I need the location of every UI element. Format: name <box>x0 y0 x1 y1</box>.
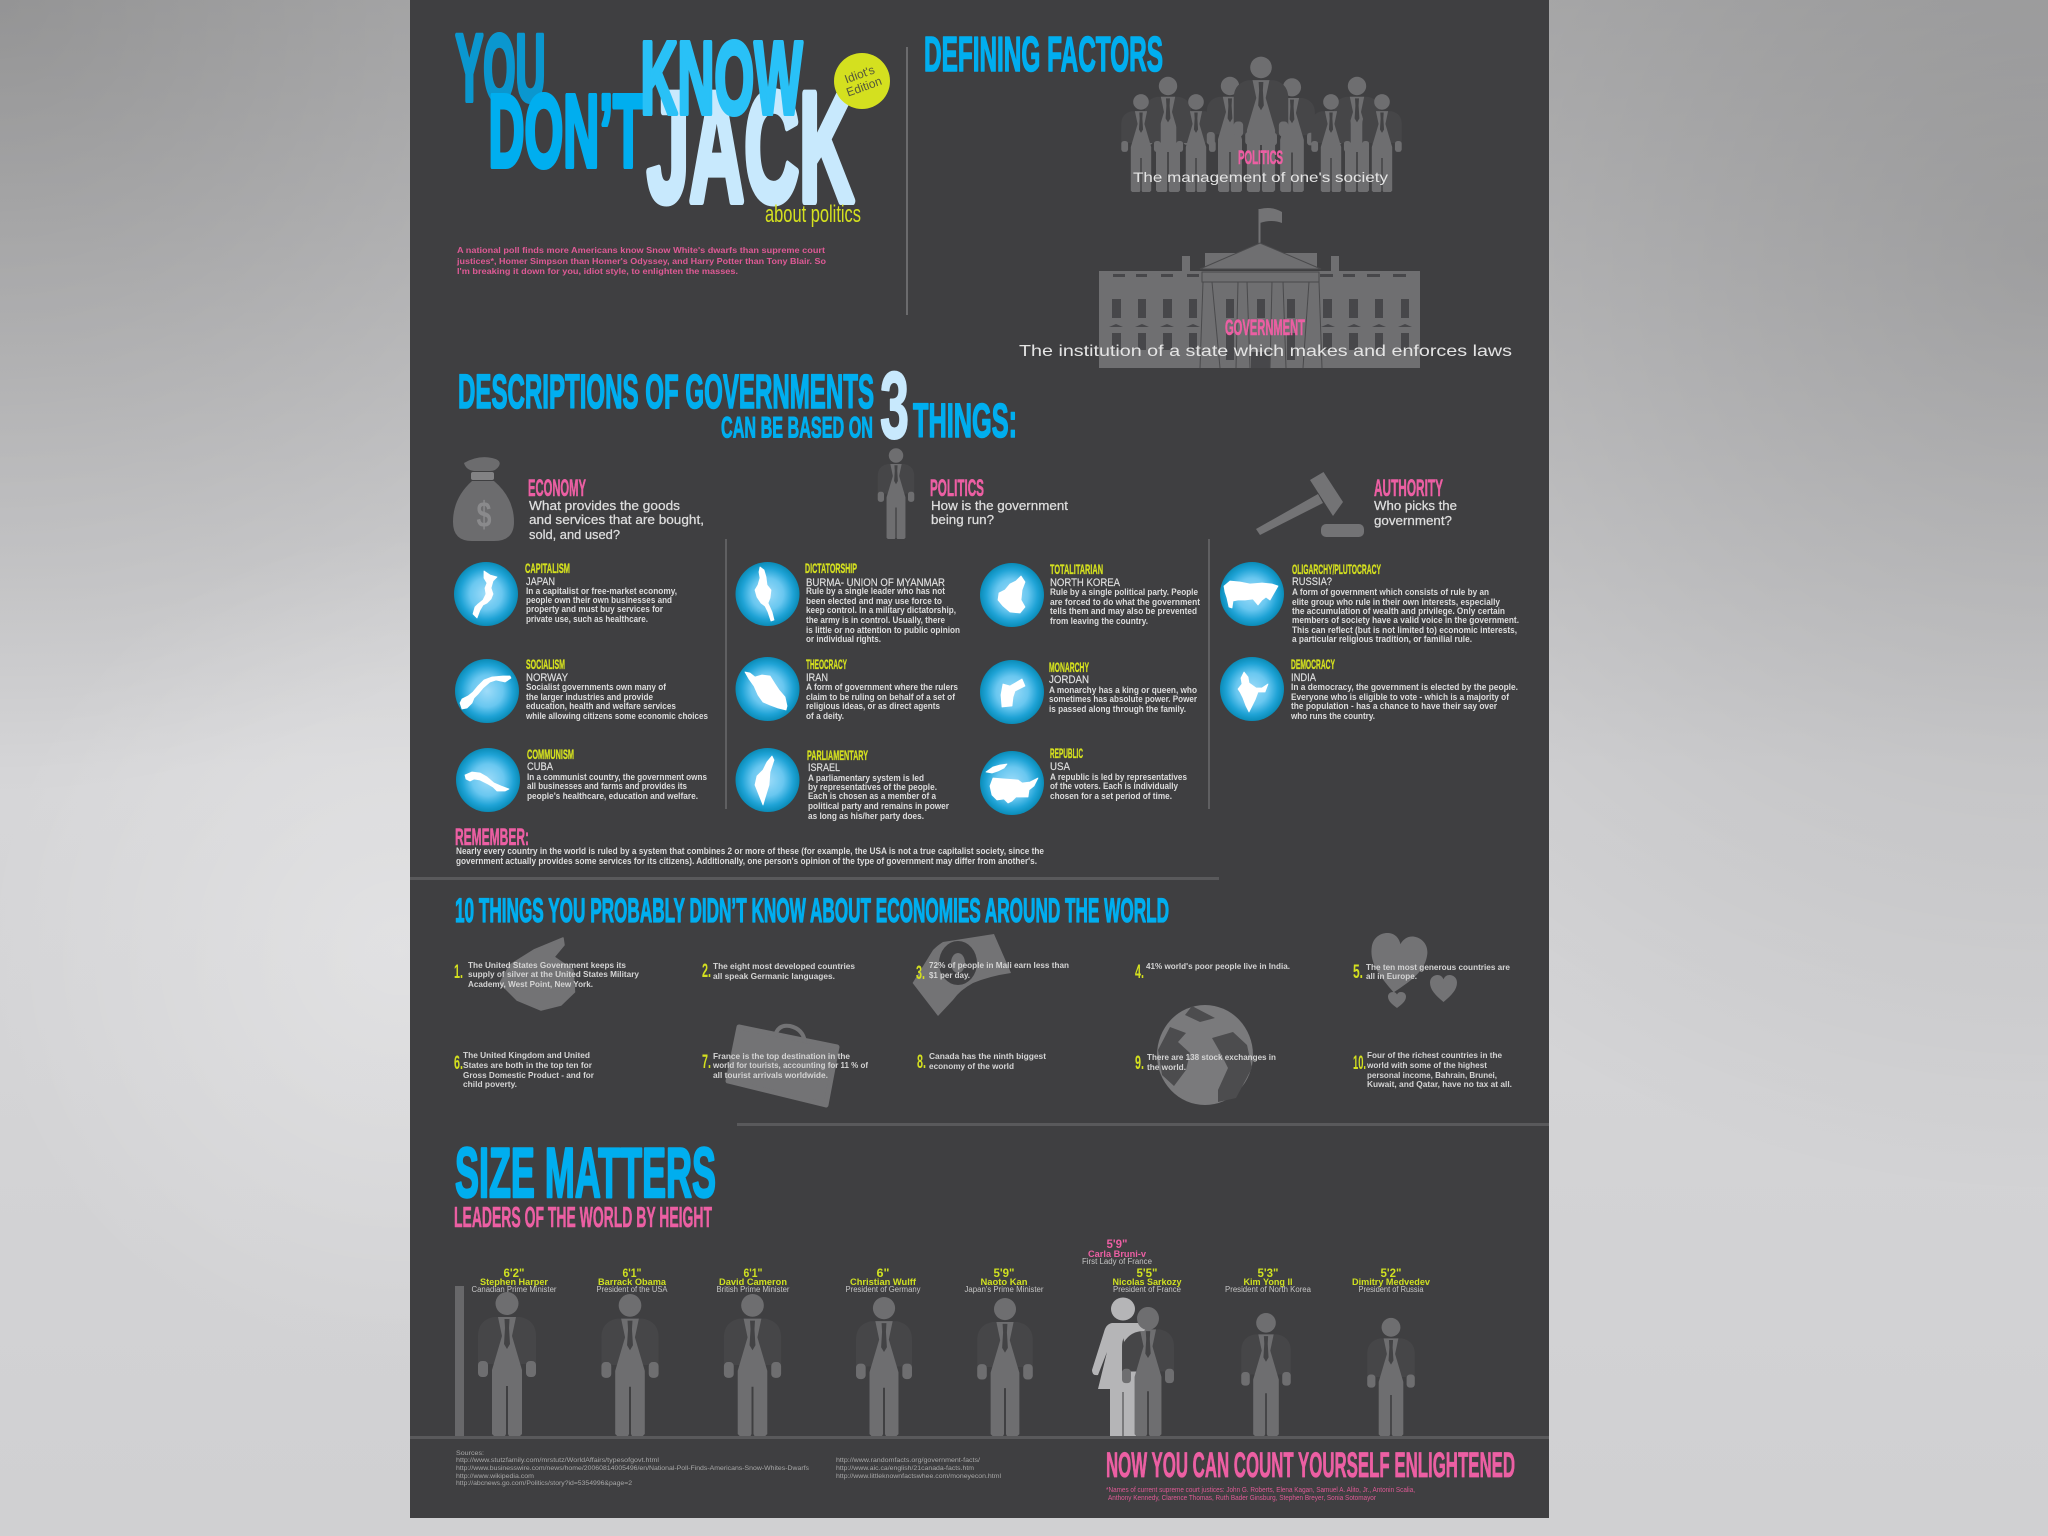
item: republic <box>980 745 1187 815</box>
panel: politics header <box>878 448 1068 539</box>
callout: remember: REMEMBER: <box>455 824 529 851</box>
leader: naoto kan: Naoto Kan <box>980 1277 1028 1287</box>
item: theocracy <box>736 656 958 721</box>
item: oligarchy: a particular religious tradition, or familial rule. <box>1292 634 1472 644</box>
map: india <box>1238 672 1268 712</box>
first lady's arm around sarkozy <box>1122 1307 1159 1342</box>
item: dictatorship: Rule by a single leader who has not <box>806 586 945 596</box>
leader: dimitry medvedev: President of Russia <box>1358 1285 1424 1294</box>
leader: nicolas sarkozy: 5'5" <box>1136 1266 1158 1280</box>
item: socialism <box>455 656 708 723</box>
item: communism: COMMUNISM <box>527 746 574 762</box>
fact 2: 2. <box>702 961 711 982</box>
fact 1: 1. <box>454 962 463 983</box>
item: socialism: the larger industries and provide <box>526 692 653 702</box>
panel: authority header: AUTHORITY <box>1374 475 1443 502</box>
item: socialism: education, health and welfare services <box>526 701 676 711</box>
leader: barack obama <box>596 1266 668 1436</box>
map: cuba <box>465 772 509 791</box>
item: communism: people's healthcare, education and welfare. <box>527 791 698 801</box>
badge: idiot's edition <box>834 53 890 109</box>
height ruler <box>455 1286 464 1437</box>
item: communism: all businesses and farms and provides its <box>527 781 687 791</box>
heading: descriptions of governments: CAN BE BASED ON <box>721 412 873 444</box>
item: democracy: DEMOCRACY <box>1291 656 1335 672</box>
fact 6: States are both in the top ten for <box>463 1060 593 1070</box>
item: totalitarian: TOTALITARIAN <box>1050 561 1103 577</box>
footnote: *Names of current supreme court justices: John G. Roberts, Elena Kagan, Samuel A. Alito, Jr., Antonin Scalia, <box>1106 1487 1415 1494</box>
item: totalitarian: are forced to do what the government <box>1050 597 1200 607</box>
item: republic: of the voters. Each is individually <box>1050 781 1178 791</box>
fact 2 <box>702 961 855 982</box>
item: parliamentary: political party and remains in power <box>808 801 949 811</box>
icon: money bag <box>453 457 514 541</box>
item: theocracy: religious ideas, or as direct agents <box>806 701 940 711</box>
heading: descriptions of governments: THINGS: <box>913 395 1017 448</box>
item: oligarchy: OLIGARCHY/PLUTOCRACY <box>1292 561 1381 577</box>
map: jordan <box>1001 679 1025 707</box>
footnote: Anthony Kennedy, Clarence Thomas, Ruth Bader Ginsburg, Stephen Breyer, Sonia Sotomayor <box>1108 1495 1377 1502</box>
callout: remember: government actually provides some services for its citizens). Additionally, one person's opinion of the type of government may differ from another's. <box>456 856 1037 866</box>
item: parliamentary: Each is chosen as a member of a <box>808 791 937 801</box>
item: capitalism: JAPAN <box>526 576 555 588</box>
item: monarchy: MONARCHY <box>1049 659 1089 675</box>
leader: stephen harper: Stephen Harper <box>480 1277 548 1287</box>
item: oligarchy: RUSSIA? <box>1292 576 1332 588</box>
fact 7: France is the top destination in the <box>713 1051 850 1061</box>
fact 7 <box>702 1051 868 1080</box>
fact 10: 10. <box>1353 1053 1366 1074</box>
item: capitalism: CAPITALISM <box>525 560 570 576</box>
fact 8: 8. <box>917 1052 926 1073</box>
sources: http://abcnews.go.com/Politics/story?id=5354996&page=2 <box>456 1481 633 1487</box>
map: norway <box>460 676 511 709</box>
fact 4 <box>1135 961 1290 983</box>
icon: suitcase <box>728 1026 837 1105</box>
title block: DON’T <box>488 74 644 188</box>
panel: politics header: POLITICS <box>930 475 984 502</box>
item: oligarchy: This can reflect (but is not limited to) economic interests, <box>1292 625 1517 635</box>
leader: nicolas sarkozy: President of France <box>1113 1285 1182 1294</box>
item: capitalism <box>454 560 677 626</box>
item: parliamentary: PARLIAMENTARY <box>807 747 868 763</box>
item: totalitarian: NORTH KOREA <box>1050 577 1121 589</box>
item: theocracy: THEOCRACY <box>806 656 847 672</box>
map: iran <box>745 672 787 710</box>
item: theocracy: A form of government where the rulers <box>806 682 958 692</box>
leader: christian wulff: 6" <box>876 1266 890 1280</box>
fact 6 <box>454 1050 595 1089</box>
item: oligarchy <box>1220 561 1519 644</box>
heading: size matters: SIZE MATTERS <box>455 1133 716 1212</box>
badge: idiot's edition: Idiot's <box>843 63 877 86</box>
badge: idiot's edition: Edition <box>844 74 884 99</box>
fact 4: 4. <box>1135 962 1144 983</box>
intro paragraph: I'm breaking it down for you, idiot style, to enlighten the masses. <box>457 266 738 276</box>
text: 10 THINGS YOU PROBABLY DIDN’T KNOW ABOUT ECONOMIES AROUND THE WORLD <box>455 892 1169 930</box>
fact 6: 6. <box>454 1053 463 1074</box>
item: parliamentary <box>736 747 949 821</box>
item: totalitarian: from leaving the country. <box>1050 616 1148 626</box>
panel: authority header: government? <box>1374 513 1452 528</box>
fact 10: personal income, Bahrain, Brunei, <box>1367 1070 1497 1080</box>
fact 1: The United States Government keeps its <box>468 960 626 970</box>
icon: hand <box>500 938 574 1010</box>
sources <box>456 1451 1001 1487</box>
icon: politics crowd <box>1121 57 1402 192</box>
fact 10: Four of the richest countries in the <box>1367 1050 1502 1060</box>
item: socialism: NORWAY <box>526 672 569 684</box>
label: politics definition: POLITICS <box>1238 148 1283 169</box>
fact 3: 3. <box>916 963 925 984</box>
leader: stephen harper <box>472 1266 557 1436</box>
item: parliamentary: as long as his/her party does. <box>808 811 924 821</box>
item: oligarchy: elite group who rule in their own interests, especially <box>1292 597 1500 607</box>
fact 1 <box>454 960 639 989</box>
item: dictatorship <box>736 560 960 644</box>
fact 9: There are 138 stock exchanges in <box>1147 1052 1276 1062</box>
item: democracy <box>1220 656 1518 721</box>
sources: http://www.wikipedia.com <box>456 1474 534 1480</box>
item: republic: USA <box>1050 761 1071 773</box>
item: socialism: while allowing citizens some economic choices <box>525 711 708 721</box>
subtitle: about politics: about politics <box>765 201 861 228</box>
intro paragraph: justices*, Homer Simpson than Homer's Odyssey, and Harry Potter than Tony Blair. So <box>456 256 826 266</box>
item: parliamentary: ISRAEL <box>808 762 840 774</box>
item: dictatorship: been elected and may use force to <box>806 596 942 606</box>
item: socialism: SOCIALISM <box>526 656 565 672</box>
fact 6: The United Kingdom and United <box>463 1050 590 1060</box>
item: theocracy: IRAN <box>806 672 828 684</box>
heading: descriptions of governments <box>458 353 1017 459</box>
map: north korea <box>998 576 1025 613</box>
item: dictatorship: DICTATORSHIP <box>805 560 857 576</box>
item: dictatorship: is little or no attention to public opinion <box>806 625 960 635</box>
item: democracy: INDIA <box>1291 672 1317 684</box>
label: government definition <box>1019 315 1512 360</box>
fact 5: The ten most generous countries are <box>1366 962 1510 972</box>
map: russia <box>1224 581 1278 608</box>
first lady: carla bruni: Carla Bruni-v <box>1088 1249 1146 1259</box>
item: monarchy: A monarchy has a king or queen, who <box>1049 685 1197 695</box>
leader: dimitry medvedev: 5'2" <box>1380 1266 1402 1280</box>
leader: naoto kan: Japan's Prime Minister <box>964 1285 1044 1294</box>
fact 10: Kuwait, and Qatar, have no tax at all. <box>1367 1079 1512 1089</box>
heading: descriptions of governments: DESCRIPTIONS OF GOVERNMENTS <box>458 366 874 419</box>
leader: barack obama: Barrack Obama <box>598 1277 667 1287</box>
item: monarchy: is passed along through the family. <box>1049 704 1186 714</box>
fact 7: 7. <box>702 1052 711 1073</box>
item: communism: CUBA <box>527 761 554 773</box>
fact 6: child poverty. <box>463 1079 517 1089</box>
item: capitalism: private use, such as healthcare. <box>526 614 648 624</box>
fact 2: The eight most developed countries <box>713 961 855 971</box>
fact 3: $1 per day. <box>929 970 970 980</box>
item: republic: A republic is led by representatives <box>1050 772 1187 782</box>
leader: nicolas sarkozy: Nicolas Sarkozy <box>1112 1277 1182 1287</box>
icon: banknote <box>913 934 1011 1016</box>
icon: globe <box>1157 1005 1253 1105</box>
list: 10 facts <box>454 960 1512 1089</box>
leader: christian wulff: President of Germany <box>846 1285 920 1294</box>
icon: leader figure <box>878 448 914 539</box>
item: capitalism: people own their own businesses and <box>526 595 672 605</box>
column dividers <box>725 539 1210 809</box>
item: theocracy: of a deity. <box>806 711 844 721</box>
item: oligarchy: members of society have a valid voice in the government. <box>1292 615 1519 625</box>
fact 5: 5. <box>1353 962 1363 983</box>
vertical divider <box>906 47 908 315</box>
item: democracy: who runs the country. <box>1290 711 1375 721</box>
icon: white house <box>1099 208 1420 368</box>
item: dictatorship: BURMA- UNION OF MYANMAR <box>806 577 945 589</box>
leader: dimitry medvedev: Dimitry Medvedev <box>1352 1277 1430 1287</box>
icon: gavel <box>1256 472 1364 537</box>
fact 4: 41% world's poor people live in India. <box>1146 961 1290 971</box>
fact 3 <box>916 960 1069 984</box>
sources: http://www.littleknownfactswhee.com/moneyecon.html <box>836 1474 1001 1480</box>
leader: christian wulff <box>846 1266 920 1436</box>
text: DEFINING FACTORS <box>924 27 1163 82</box>
leader: nicolas sarkozy <box>1112 1266 1182 1436</box>
item: capitalism: property and must buy services for <box>526 604 663 614</box>
map: israel <box>755 756 774 805</box>
panel: economy header: What provides the goods <box>529 498 681 513</box>
label: government definition: GOVERNMENT <box>1225 315 1305 340</box>
label: politics definition <box>1133 148 1388 185</box>
item: oligarchy: A form of government which consists of rule by an <box>1292 587 1489 597</box>
first lady: carla bruni: 5'9" <box>1106 1237 1128 1251</box>
leader: christian wulff: Christian Wulff <box>850 1277 917 1287</box>
leader: naoto kan: 5'9" <box>994 1266 1014 1280</box>
fact 10 <box>1353 1050 1512 1089</box>
title block: KNOW <box>640 20 803 136</box>
label: politics definition: The management of one's society <box>1133 169 1388 185</box>
icon: money bag: $ <box>476 494 492 535</box>
item: socialism: Socialist governments own many of <box>526 682 667 692</box>
leader: barack obama: 6'1" <box>622 1266 642 1280</box>
fact 9 <box>1135 1052 1276 1074</box>
fact 5: all in Europe. <box>1366 971 1417 981</box>
fact 2: all speak Germanic languages. <box>713 971 835 981</box>
title block: JACK <box>647 61 854 235</box>
map: usa <box>986 764 1038 803</box>
fact 1: Academy, West Point, New York. <box>468 979 593 989</box>
footnote <box>1106 1487 1415 1502</box>
leader: barack obama: President of the USA <box>596 1285 668 1294</box>
item: democracy: Everyone who is eligible to vote - which is a majority of <box>1291 692 1510 702</box>
text: LEADERS OF THE WORLD BY HEIGHT <box>454 1202 712 1234</box>
intro paragraph: A national poll finds more Americans know Snow White's dwarfs than supreme court <box>457 245 825 255</box>
leader: david cameron: 6'1" <box>744 1266 762 1280</box>
fact 8 <box>917 1051 1046 1073</box>
callout: remember: Nearly every country in the world is ruled by a system that combines 2 or more of these (for example, the USA is not a true capitalist society, since the <box>456 846 1044 856</box>
item: democracy: In a democracy, the government is elected by the people. <box>1291 682 1518 692</box>
fact 7: world for tourists, accounting for 11 % of <box>712 1060 868 1070</box>
fact 10: world with some of the highest <box>1366 1060 1487 1070</box>
label: government definition: The institution of a state which makes and enforces laws <box>1019 343 1512 360</box>
item: totalitarian: Rule by a single political party. People <box>1050 587 1198 597</box>
fact 1: supply of silver at the United States Military <box>468 969 639 979</box>
sources: http://www.businesswire.com/news/home/20060814005496/en/National-Poll-Finds-Americans-Snow-Whites-Dwarfs <box>456 1466 809 1472</box>
heading: descriptions of governments: 3 <box>880 353 909 459</box>
item: dictatorship: the army is in control. Usually, there <box>806 615 945 625</box>
leader: kim yong il <box>1225 1266 1312 1436</box>
item: dictatorship: or individual rights. <box>806 634 881 644</box>
intro paragraph <box>456 245 826 276</box>
fact 9: 9. <box>1135 1053 1144 1074</box>
item: democracy: the population - has a chance to have their say over <box>1291 701 1497 711</box>
poster panel <box>410 0 1549 1518</box>
icon: hearts <box>1366 931 1457 1008</box>
panel: economy header <box>453 457 704 542</box>
title block: YOU <box>456 16 546 122</box>
fact 9: the world. <box>1147 1062 1186 1072</box>
chart: leaders by height <box>472 1237 1430 1436</box>
leader: kim yong il: President of North Korea <box>1225 1285 1312 1294</box>
fact 8: economy of the world <box>929 1061 1014 1071</box>
item: totalitarian <box>980 561 1200 627</box>
fact 3: 72% of people in Mali earn less than <box>929 960 1069 970</box>
leader: stephen harper: Canadian Prime Minister <box>472 1285 557 1294</box>
sources: http://www.stutzfamily.com/mrstutz/WorldAffairs/typesofgovt.html <box>456 1458 659 1464</box>
panel: economy header: ECONOMY <box>528 475 586 502</box>
leader: dimitry medvedev <box>1352 1266 1430 1436</box>
panel: economy header: and services that are bought, <box>529 512 704 527</box>
item: communism <box>456 746 707 812</box>
sources: http://www.aic.ca/english/21canada-facts.htm <box>836 1466 974 1472</box>
fact 6: Gross Domestic Product - and for <box>463 1070 595 1080</box>
first lady: carla bruni <box>1082 1237 1153 1436</box>
item: theocracy: claim to be ruling on behalf of a set of <box>806 692 956 702</box>
item: parliamentary: A parliamentary system is led <box>808 773 924 783</box>
panel: economy header: sold, and used? <box>529 527 620 542</box>
leader: kim yong il: Kim Yong Il <box>1244 1277 1292 1287</box>
item: monarchy: JORDAN <box>1049 674 1089 686</box>
item: republic: chosen for a set period of time. <box>1050 791 1172 801</box>
leader: david cameron <box>716 1266 790 1436</box>
panel: politics header: being run? <box>931 512 994 527</box>
fact 8: Canada has the ninth biggest <box>929 1051 1046 1061</box>
item: oligarchy: the accumulation of wealth and privilege. Only certain <box>1292 606 1505 616</box>
item: communism: In a communist country, the government owns <box>527 772 707 782</box>
item: totalitarian: tells them and may also be prevented <box>1050 606 1197 616</box>
item: republic: REPUBLIC <box>1050 745 1083 761</box>
sources: http://www.randomfacts.org/government-facts/ <box>836 1458 980 1464</box>
first lady: carla bruni: First Lady of France <box>1082 1257 1153 1266</box>
leader: naoto kan <box>964 1266 1044 1436</box>
item: dictatorship: keep control. In a military dictatorship, <box>806 605 956 615</box>
callout: remember <box>455 824 1044 866</box>
title block <box>456 16 890 235</box>
panel: politics header: How is the government <box>931 498 1068 513</box>
item: monarchy: sometimes has absolute power. Power <box>1049 694 1197 704</box>
leader: stephen harper: 6'2" <box>504 1266 524 1280</box>
leader: kim yong il: 5'3" <box>1258 1266 1278 1280</box>
text: NOW YOU CAN COUNT YOURSELF ENLIGHTENED <box>1106 1446 1515 1485</box>
sources: Sources: <box>456 1451 484 1457</box>
fact 7: all tourist arrivals worldwide. <box>713 1070 828 1080</box>
item: monarchy <box>980 659 1197 724</box>
map: japan <box>473 571 497 618</box>
panel: authority header <box>1256 472 1457 537</box>
leader: david cameron: David Cameron <box>719 1277 787 1287</box>
map: burma <box>755 567 774 621</box>
item: capitalism: In a capitalist or free-market economy, <box>526 586 677 596</box>
item: parliamentary: by representatives of the people. <box>808 782 937 792</box>
leader: david cameron: British Prime Minister <box>716 1285 790 1294</box>
fact 5 <box>1353 962 1510 983</box>
panel: authority header: Who picks the <box>1374 498 1457 513</box>
